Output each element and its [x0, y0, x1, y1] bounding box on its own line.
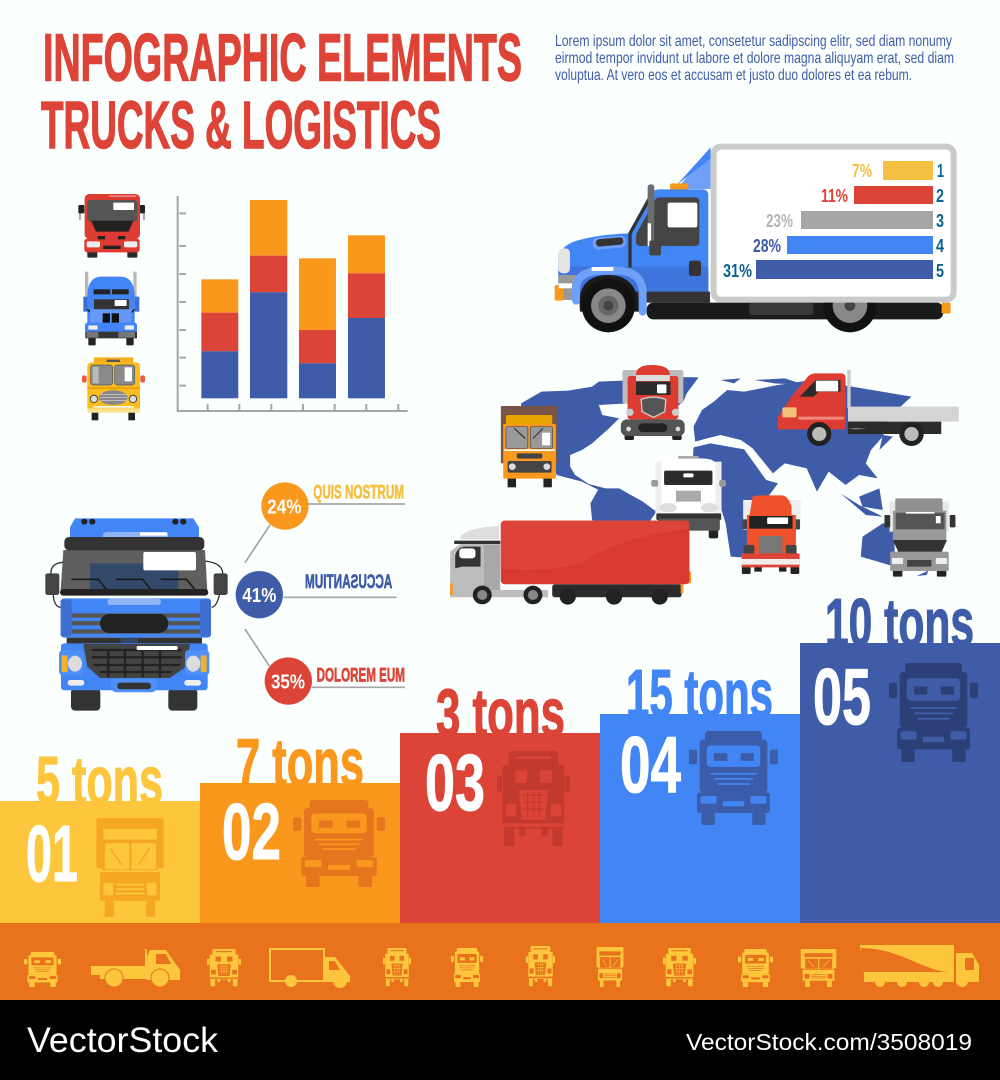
- title: TRUCKS & LOGISTICS: [41, 88, 441, 163]
- panel: world map with trucks: [450, 365, 959, 605]
- callout: 24% quis nostrum: 24%: [267, 496, 302, 518]
- bar 2: 11%: 11%: [821, 186, 848, 206]
- bar 4: [348, 235, 385, 398]
- panel: box truck with bar chart: [555, 147, 954, 332]
- icon: bus 2: [801, 949, 836, 987]
- bar 3: 23%: 3: [936, 211, 944, 231]
- callout: 41% accusantium (mirrored): 41%: [242, 585, 277, 607]
- bar 2: [250, 200, 287, 398]
- footer bar: [0, 1000, 1000, 1080]
- bar 5: 31%: [723, 260, 944, 281]
- truck cab and wheels: [555, 147, 951, 332]
- icon: yellow bus truck: [82, 357, 145, 420]
- step block: [0, 801, 200, 923]
- label: 3 tons: 3 tons: [436, 675, 565, 751]
- panel: step 04: [600, 656, 800, 923]
- icon: bonnet 1: [207, 949, 241, 986]
- label: 15 tons: 15 tons: [626, 656, 773, 732]
- number: 04: [620, 720, 681, 809]
- icon: cab 2: [451, 948, 483, 987]
- number: 05: [813, 652, 871, 741]
- number: 03: [425, 738, 485, 827]
- chart: stacked bars: [178, 196, 408, 411]
- step block: [200, 783, 400, 923]
- panel: step 02: [200, 725, 400, 923]
- bar 2: 11%: 2: [936, 186, 944, 206]
- bar 1: 7%: [852, 161, 944, 181]
- footer url: VectorStock.com/3508019: [686, 1029, 972, 1055]
- large blue truck front: [45, 518, 228, 711]
- icon: bonnet 3: [526, 946, 555, 986]
- callout: 24% quis nostrum: [261, 482, 404, 530]
- world map: [521, 377, 928, 576]
- step block: [600, 714, 800, 923]
- bar 2: 11%: [821, 186, 944, 206]
- cargo box frame: [714, 147, 954, 300]
- callout: 35% dolorem eum: DOLOREM EUM: [317, 665, 405, 686]
- panel: icon strip: [0, 923, 1000, 1000]
- truck icons column: [78, 194, 145, 420]
- title: INFOGRAPHIC ELEMENTS: [43, 20, 522, 96]
- panel: step 01: [0, 743, 200, 923]
- callout: 35% dolorem eum: [265, 657, 405, 705]
- callout: 41% accusantium (mirrored): ACCUSANTIUM: [305, 572, 392, 593]
- title: [41, 20, 522, 163]
- number: 02: [222, 787, 281, 876]
- bar 3: 23%: [766, 211, 944, 231]
- panel: step 03: [400, 675, 600, 923]
- label: 7 tons: 7 tons: [236, 725, 364, 801]
- bar chart on truck: [723, 161, 944, 281]
- footer logo: VectorStock: [27, 1021, 219, 1060]
- icon: bonnet 2: [383, 948, 411, 986]
- number: 01: [26, 809, 78, 898]
- strip background: [0, 923, 1000, 1000]
- icon: flatbed side: [91, 949, 180, 987]
- truck: red flatbed side: [778, 370, 959, 446]
- panel: front truck with percentage callouts: [45, 482, 405, 711]
- truck: grey front: [884, 498, 955, 577]
- connector lines: [245, 504, 405, 687]
- bar 4: 28%: 28%: [753, 236, 781, 256]
- icon: cab 3: [738, 949, 773, 987]
- bar 3: [299, 258, 336, 398]
- bar 4: 28%: [753, 236, 944, 256]
- truck: white front: [651, 456, 726, 538]
- icon: cab silhouette: [689, 731, 778, 825]
- icon: long trailer side: [860, 945, 979, 987]
- icon: blue truck: [83, 272, 139, 345]
- icon: cab silhouette: [293, 800, 385, 887]
- step block: [400, 733, 600, 923]
- icon: bus silhouette: [96, 818, 164, 917]
- truck: yellow front: [501, 406, 558, 487]
- truck: orange-red front: [741, 495, 801, 574]
- bar 3: 23%: 23%: [766, 211, 793, 231]
- step block: [800, 643, 1000, 923]
- label: 5 tons: 5 tons: [36, 743, 163, 819]
- callout: 35% dolorem eum: 35%: [271, 671, 305, 693]
- icon: red truck: [78, 194, 145, 258]
- intro paragraph: [555, 33, 954, 84]
- bar 1: 7%: 7%: [852, 161, 872, 181]
- bar 1: 7%: 1: [937, 161, 944, 181]
- bar 5: 31%: 31%: [723, 261, 752, 281]
- panel: step 05: [800, 585, 1000, 923]
- icon: box truck side: [270, 949, 350, 988]
- icon: bonnet 4: [663, 948, 696, 986]
- icon: bus 1: [597, 947, 623, 987]
- icon: bonnet silhouette: [497, 751, 570, 846]
- bar 1: [201, 279, 238, 398]
- chart axes: [178, 196, 408, 411]
- bar 4: 28%: 4: [936, 236, 944, 256]
- icon: cab silhouette: [889, 663, 978, 762]
- callout: 41% accusantium (mirrored): [236, 571, 392, 618]
- icon: cab 1: [24, 952, 61, 987]
- truck: red front with grille: [621, 365, 685, 440]
- callout: 24% quis nostrum: QUIS NOSTRUM: [313, 482, 404, 503]
- truck: long red trailer: [450, 521, 691, 605]
- bar 5: 31%: 5: [936, 261, 944, 281]
